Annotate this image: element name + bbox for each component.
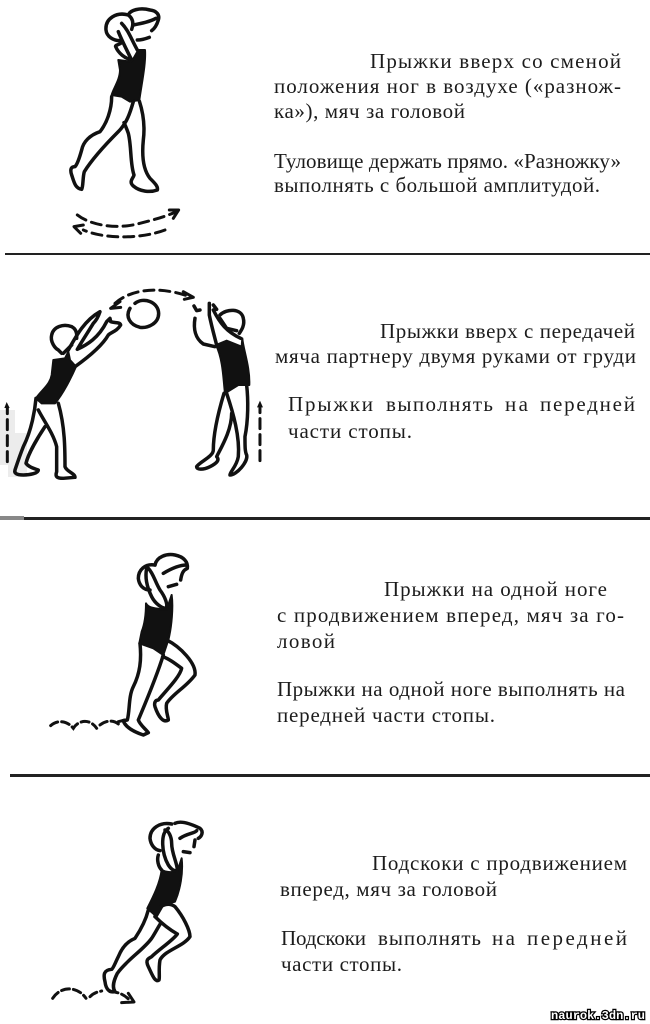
panel: exercise 2 xyxy=(0,290,636,478)
text: exercise 1 instruction: Туловище держать прямо. «Разножку» xyxy=(274,149,621,173)
text: exercise 2 instruction: Прыжки xyxy=(288,392,373,416)
text: exercise 4 instruction: на xyxy=(492,926,516,950)
text: exercise 1 title: положения ног в воздухе («разнож- xyxy=(274,74,621,98)
panel: exercise 4 xyxy=(53,822,627,1003)
text: exercise 3 title: с продвижением вперед, мяч за го- xyxy=(277,603,624,627)
text: exercise 1 title: ка»), мяч за головой xyxy=(274,99,465,123)
arrow: up right xyxy=(257,401,263,461)
figure: girl skipping forward xyxy=(104,822,202,992)
text: exercise 3 instruction: передней части стопы. xyxy=(277,703,495,727)
figure: girl throwing ball xyxy=(15,312,121,478)
text: exercise 1 title xyxy=(274,49,621,123)
panel: exercise 1 xyxy=(71,9,621,237)
text: exercise 2 title xyxy=(275,319,636,368)
text: exercise 4 instruction: части стопы. xyxy=(281,952,402,976)
figure: girl hopping on one leg xyxy=(123,555,195,735)
text: exercise 1 instruction: выполнять с большой амплитудой. xyxy=(274,173,600,197)
ball xyxy=(128,300,159,327)
arrow: hopping path xyxy=(51,720,125,728)
text: exercise 2 title: мяча партнеру двумя руками от груди xyxy=(275,344,636,368)
text: exercise 4 instruction: Подскоки xyxy=(281,926,366,950)
text: exercise 2 instruction xyxy=(288,392,635,443)
figure: girl with ball behind head, leg split jump xyxy=(71,9,159,191)
arrows: ball flight xyxy=(111,290,193,308)
arrow: up left xyxy=(4,402,10,462)
text: exercise 4 instruction: передней xyxy=(527,926,627,950)
text: exercise 2 instruction: выполнять xyxy=(386,392,493,416)
text: exercise 2 title: Прыжки вверх с передачей xyxy=(380,319,635,343)
text: exercise 3 instruction xyxy=(277,677,626,727)
text: exercise 4 title: Подскоки с продвижением xyxy=(372,851,627,875)
panel: exercise 3 xyxy=(51,555,626,735)
watermark: naurok.3dn.ru xyxy=(551,1009,645,1023)
arrows: leg change direction xyxy=(74,210,179,237)
text: exercise 3 title xyxy=(277,577,624,653)
text: exercise 2 instruction: части стопы. xyxy=(288,419,412,443)
text: exercise 1 instruction xyxy=(274,149,621,197)
text: exercise 4 title: вперед, мяч за головой xyxy=(280,877,497,901)
text: exercise 2 instruction: передней xyxy=(540,392,635,416)
text: exercise 3 title: Прыжки на одной ноге xyxy=(384,577,607,601)
smudge on scan xyxy=(0,410,27,477)
text: exercise 3 title: ловой xyxy=(277,629,335,653)
text: exercise 1 title: Прыжки вверх со сменой xyxy=(370,49,621,73)
figure: girl catching ball xyxy=(194,303,249,475)
text: exercise 2 instruction: на xyxy=(505,392,529,416)
text: exercise 3 instruction: Прыжки на одной ноге выполнять на xyxy=(277,677,626,701)
text: exercise 4 instruction xyxy=(281,926,627,976)
arrow: skipping path xyxy=(53,989,134,1003)
text: exercise 4 instruction: выполнять xyxy=(378,926,481,950)
text: exercise 4 title xyxy=(280,851,627,901)
